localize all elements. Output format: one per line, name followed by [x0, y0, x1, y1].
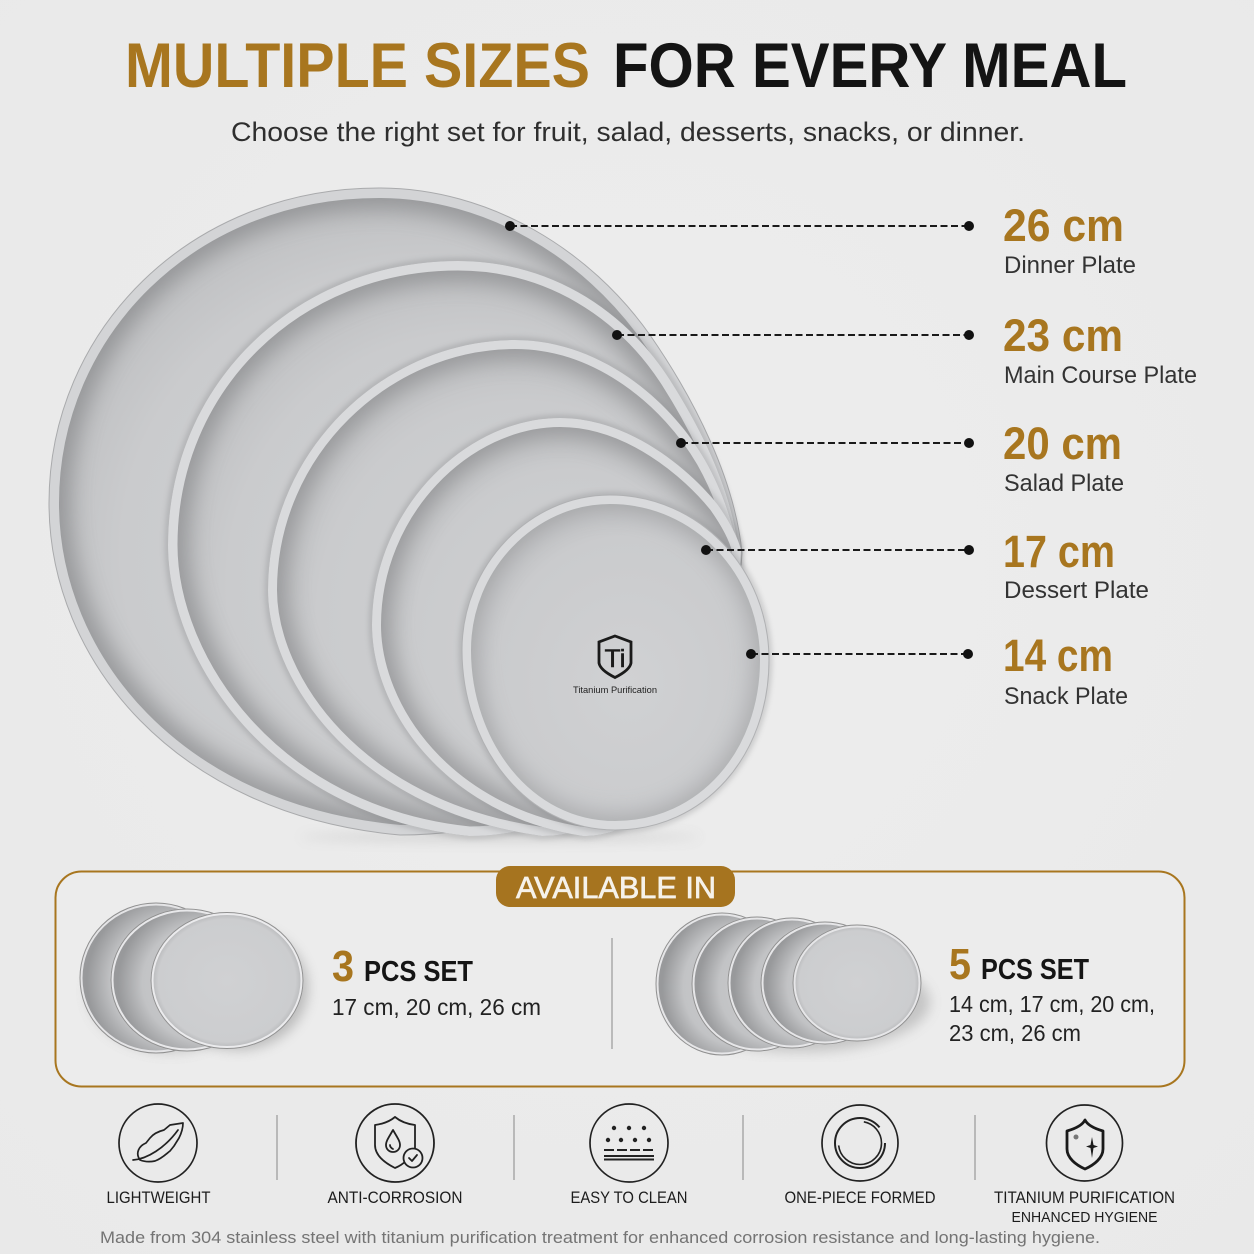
size label: 14 cm snack plate: Snack Plate	[1004, 683, 1128, 710]
text: 3 pcs set: 17 cm, 20 cm, 26 cm	[332, 994, 541, 1020]
size label: 20 cm salad plate: Salad Plate	[1004, 470, 1124, 497]
feature: easy to clean	[570, 1104, 688, 1207]
feature: lightweight	[106, 1104, 210, 1207]
leader lines	[505, 221, 974, 659]
plate: 23 cm main course plate	[168, 261, 738, 836]
size label: 20 cm salad plate: 20 cm	[1003, 418, 1122, 469]
icon: shield with sparkle	[1046, 1105, 1122, 1181]
icon: droplets on surface	[590, 1104, 668, 1182]
icon: feather	[119, 1104, 197, 1182]
feature: one-piece formed: ONE-PIECE FORMED	[784, 1189, 936, 1207]
logo: titanium purification: Ti	[604, 645, 626, 673]
text: 3 pcs set: 3	[332, 942, 354, 991]
icon: shield with drop	[356, 1104, 434, 1182]
feature: titanium purification: ENHANCED HYGIENE	[1012, 1209, 1158, 1226]
size label: 23 cm main course plate: 23 cm	[1003, 310, 1123, 361]
size label: 20 cm salad plate	[1003, 418, 1124, 497]
text: 5 pcs set: 14 cm, 17 cm, 20 cm,	[949, 991, 1155, 1017]
text: 5 pcs set: 23 cm, 26 cm	[949, 1020, 1081, 1046]
feature: easy to clean: EASY TO CLEAN	[570, 1189, 688, 1207]
title: MULTIPLE SIZES	[125, 31, 590, 101]
size label: 26 cm dinner plate: 26 cm	[1003, 200, 1124, 251]
text: 3 pcs set	[332, 942, 541, 1020]
size label: 23 cm main course plate	[1003, 310, 1197, 389]
plate: 20 cm salad plate	[268, 340, 738, 836]
size label: 26 cm dinner plate: Dinner Plate	[1004, 252, 1136, 279]
feature: anti-corrosion: ANTI-CORROSION	[328, 1189, 462, 1207]
text: 5 pcs set: PCS SET	[981, 954, 1089, 986]
feature: titanium purification: TITANIUM PURIFICATION	[994, 1189, 1175, 1207]
panel: available in	[56, 866, 1184, 1086]
logo: titanium purification	[573, 636, 657, 696]
feature: lightweight: LIGHTWEIGHT	[106, 1189, 210, 1207]
feature: anti-corrosion	[328, 1104, 462, 1207]
logo: titanium purification: Titanium Purification	[573, 685, 657, 696]
size label: 26 cm dinner plate	[1003, 200, 1136, 279]
footnote: Made from 304 stainless steel with titanium purification treatment for enhanced corrosion resistance and long-lasting hygiene.	[100, 1228, 1100, 1247]
title	[125, 31, 1127, 101]
size label: 14 cm snack plate: 14 cm	[1003, 630, 1113, 681]
plate: 17 cm dessert plate	[372, 418, 741, 836]
badge: available in: AVAILABLE IN	[516, 870, 716, 905]
size label: 17 cm dessert plate: Dessert Plate	[1004, 577, 1149, 604]
title: FOR EVERY MEAL	[613, 31, 1127, 101]
image: 5 piece plate set	[656, 913, 930, 1055]
size label: 17 cm dessert plate: 17 cm	[1003, 526, 1115, 577]
floor shadow	[300, 834, 700, 840]
plate: 14 cm snack plate	[462, 495, 769, 830]
feature: one-piece formed	[784, 1105, 936, 1207]
icon: seamless ring	[822, 1105, 898, 1181]
size label: 17 cm dessert plate	[1003, 526, 1149, 604]
plates stack illustration	[49, 188, 769, 840]
size label: 14 cm snack plate	[1003, 630, 1128, 710]
size label: 23 cm main course plate: Main Course Plate	[1004, 362, 1197, 389]
text: 5 pcs set	[949, 940, 1155, 1046]
text: 5 pcs set: 5	[949, 940, 971, 989]
text: 3 pcs set: PCS SET	[364, 956, 473, 988]
subtitle: Choose the right set for fruit, salad, desserts, snacks, or dinner.	[231, 117, 1025, 147]
image: 3 piece plate set	[80, 903, 308, 1053]
plate: 26 cm dinner plate	[49, 188, 742, 835]
feature: titanium purification	[994, 1105, 1175, 1226]
